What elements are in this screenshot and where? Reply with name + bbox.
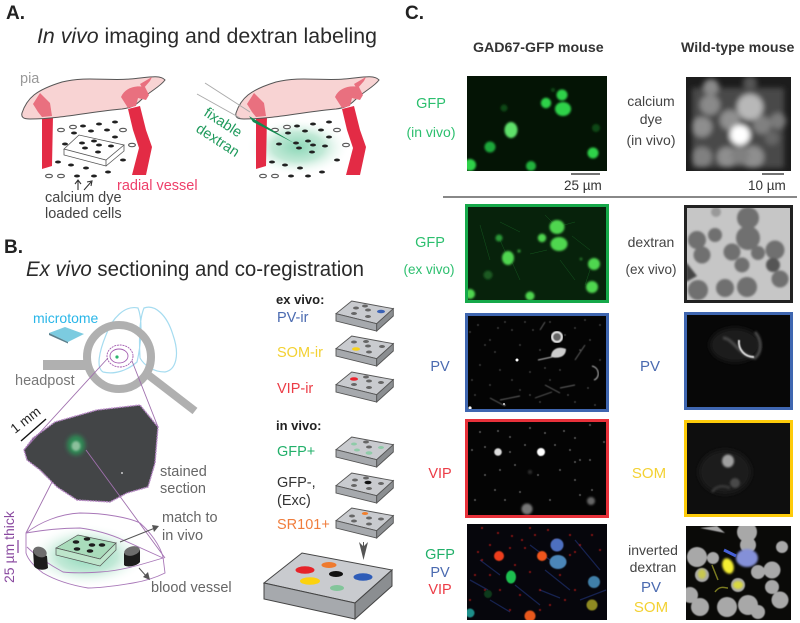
dextran glow (246, 118, 350, 176)
heading: ex vivo: ex vivo: (276, 292, 324, 307)
label: headpost: headpost (15, 373, 75, 389)
arrows to cells (75, 180, 92, 190)
row labels: right column: calcium (627, 93, 675, 109)
row labels: right column: SOM (634, 599, 668, 616)
tissue section diagram (1, 510, 232, 596)
image: PV left (465, 313, 609, 412)
row labels: left column: PV (430, 565, 450, 581)
panel label C: C. (405, 3, 424, 24)
label: GFP- Exc: (Exc) (277, 493, 311, 509)
image: GFP ex vivo (465, 204, 609, 303)
green glow (27, 524, 147, 588)
column heading: GAD67-GFP mouse: GAD67-GFP mouse (473, 40, 604, 56)
stained section image (8, 358, 207, 558)
label: blood vessel: blood vessel (151, 580, 232, 596)
label: stained section: section (160, 481, 206, 497)
row labels: right column: dextran (628, 234, 674, 250)
label: SR101+: SR101+ (277, 517, 330, 533)
image: inverted dextran PV SOM (682, 522, 791, 620)
slab PV (336, 301, 393, 331)
label: GFP+: GFP+ (277, 444, 315, 460)
microtome icon (49, 327, 84, 342)
image: merged GFP PV VIP (466, 524, 607, 622)
label: GFP- Exc: GFP-, (277, 475, 316, 491)
down arrow (359, 542, 368, 560)
panel label B: B. (4, 237, 23, 258)
row labels: right column: (ex vivo) (625, 262, 677, 277)
image: SOM right (684, 420, 793, 517)
row labels: left column: GFP (425, 547, 455, 563)
image: PV right (684, 312, 793, 410)
row labels: left column: PV (430, 359, 450, 375)
row labels: left column: (in vivo) (406, 124, 456, 140)
panel A title: In vivo imaging and dextran labeling (37, 25, 377, 48)
row labels: right column: dextran (630, 559, 676, 575)
pipette (197, 83, 250, 118)
blood vessel cylinders (32, 545, 141, 570)
label: VIP-ir: VIP-ir (277, 381, 313, 397)
label: SOM-ir: SOM-ir (277, 345, 323, 361)
column heading: Wild-type mouse: Wild-type mouse (681, 40, 794, 56)
row labels: left column: VIP (428, 466, 452, 482)
heading: in vivo: in vivo: (276, 418, 322, 433)
slab GFP (336, 437, 393, 467)
row labels: right column (625, 93, 678, 616)
row labels: right column: dye (640, 111, 662, 127)
headpost (43, 325, 195, 411)
slab VIP (336, 372, 393, 402)
panel A right: dextran labeling schematic (193, 77, 379, 178)
label: match to in vivo: in vivo (162, 528, 203, 544)
label: radial vessel: radial vessel (117, 178, 198, 194)
label: stained section: stained (160, 464, 207, 480)
zoom projection lines (24, 358, 165, 558)
slab SOM (336, 336, 393, 366)
row labels: left column: VIP (428, 582, 452, 598)
image: GFP in vivo (464, 76, 607, 193)
panel B title: Ex vivo sectioning and co-registration (26, 258, 364, 281)
label: calcium dye loaded cells: calcium dye (45, 190, 122, 206)
row labels: right column: PV (641, 579, 661, 596)
brain outline (99, 307, 176, 373)
slab SR101 (336, 508, 393, 538)
image: dextran ex vivo (684, 205, 793, 303)
section outline (26, 513, 165, 588)
row labels: right column: (in vivo) (626, 132, 676, 148)
imaged block (56, 535, 116, 559)
arrows (120, 525, 159, 580)
row labels: left column (403, 96, 456, 598)
scale bar 10 um: 10 µm (748, 178, 786, 193)
imaging volume box (64, 135, 124, 166)
row labels: right column: PV (640, 358, 660, 375)
label: match to in vivo: match to (162, 510, 218, 526)
label: calcium dye loaded cells: loaded cells (45, 206, 122, 222)
image: VIP left (465, 419, 609, 518)
injection site contours (107, 345, 133, 367)
slab Exc (336, 473, 393, 503)
row labels: left column: (ex vivo) (403, 262, 455, 277)
label: PV-ir: PV-ir (277, 310, 309, 326)
panel B right: marker slabs column (264, 292, 393, 619)
panel label A: A. (6, 3, 25, 24)
label: pia: pia (20, 71, 40, 87)
scale bar 25 um: 25 µm (564, 178, 602, 193)
divider between in vivo and ex vivo (443, 196, 797, 198)
row labels: right column: SOM (632, 465, 666, 482)
row labels: left column: GFP (415, 235, 445, 251)
panel A left: in vivo imaging schematic (20, 71, 198, 222)
label: fixable dextran: dextran (193, 121, 242, 161)
scale bar: 1 mm: 1 mm (8, 404, 43, 436)
label: fixable dextran: fixable (201, 105, 245, 141)
row labels: left column: GFP (416, 96, 446, 112)
label: fixable dextran (193, 105, 245, 161)
label: microtome: microtome (33, 310, 99, 326)
combined slab (264, 553, 392, 619)
row labels: right column: inverted (628, 542, 678, 558)
panel B: headpost and brain diagram (15, 307, 195, 411)
label: 25 um thick: 25 µm thick (1, 510, 17, 583)
image: calcium dye in vivo (686, 76, 791, 193)
